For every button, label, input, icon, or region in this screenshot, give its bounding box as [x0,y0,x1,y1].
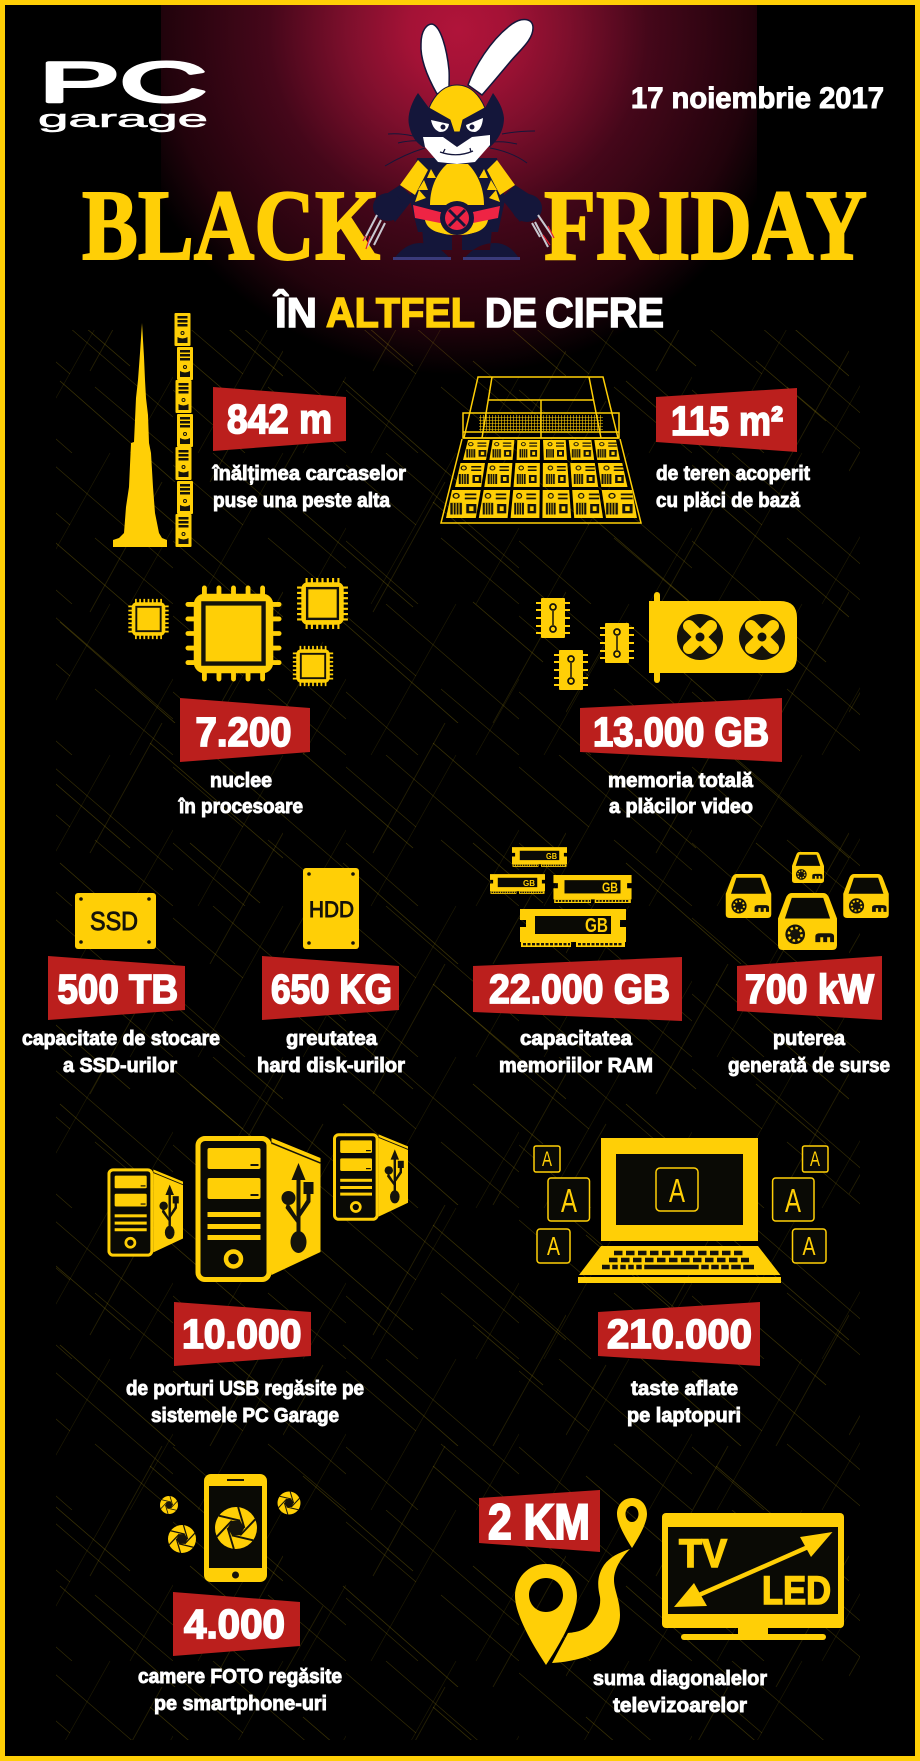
stat: 2 KM [479,1490,844,1717]
banner [213,387,346,451]
caption: pe laptopuri [627,1405,741,1427]
mascot: wolverine rabbit [363,19,554,260]
icon: laptop [578,1138,781,1283]
arms [400,160,515,195]
double arrow [674,1532,832,1607]
icon: RAM sticks: GB [585,915,608,937]
key letters: A [810,1148,820,1171]
stat: 650 KG [257,868,405,1077]
logo: PC Garage [38,50,208,133]
shorts [425,220,488,235]
subtitle: ALTFEL [326,289,475,336]
value: 7.200 [196,709,292,755]
icon: TV [662,1513,844,1640]
stat: 842 m [113,313,406,547]
caption: camere FOTO regăsite [138,1666,342,1688]
subtitle: CIFRE [545,289,664,336]
caption: de teren acoperit [656,463,810,485]
caption: pe smartphone-uri [154,1693,327,1715]
caption: memoria totală [608,770,754,792]
icon: processors [128,578,348,686]
key letters: A [785,1182,801,1219]
banner [473,957,682,1021]
stat: 10.000 [109,1134,408,1427]
icon: camera apertures [159,1492,301,1553]
belly [430,164,484,205]
banner [479,1490,600,1552]
icon: SSD: SSD [90,906,138,936]
key letters: A [561,1182,577,1219]
subtitle: ÎN [273,288,317,336]
caption [627,1378,741,1427]
caption [656,463,810,512]
banner [262,956,399,1020]
banner [173,1592,300,1656]
date: 17 noiembrie 2017 [631,82,884,115]
title: Black Friday: BLACK [82,169,380,281]
key letters [542,1148,820,1261]
caption: înălțimea carcaselor [212,463,406,485]
logo: PC Garage: garage [38,106,208,133]
icon: HDD: HDD [309,897,354,922]
claws [364,215,553,247]
stat: 210.000 [534,1138,828,1427]
caption [608,770,754,818]
subtitle: DE [485,289,537,336]
icon: RAM sticks: GB [546,852,557,861]
stat: 115 m2 [441,377,810,523]
logo: PC Garage: PC [39,50,207,114]
TV text: TV [679,1532,727,1576]
caption: hard disk-urilor [257,1055,405,1077]
ears [421,19,533,95]
stat: 4.000 [138,1474,342,1715]
value: 22.000 GB [489,966,670,1012]
value: 500 TB [58,966,178,1012]
caption: puterea [773,1028,846,1050]
caption: cu plăci de bază [656,490,801,512]
caption: taste aflate [631,1378,738,1400]
caption: a plăcilor video [609,796,753,818]
caption: capacitatea [520,1028,633,1050]
icon: route with pins [515,1498,647,1665]
icon: SSD [75,893,156,949]
icon: RAM sticks: GB [523,879,535,888]
LED text: LED [762,1569,831,1613]
belt [413,205,500,223]
caption: capacitate de stocare [22,1028,220,1050]
banner [48,956,185,1020]
icon: video card [649,592,797,683]
caption: de porturi USB regăsite pe [126,1378,364,1400]
caption [499,1028,653,1077]
caption [257,1028,405,1077]
icon: RAM sticks: GB [602,879,618,895]
caption [212,463,406,512]
banner [656,388,797,452]
caption: sistemele PC Garage [151,1405,339,1427]
caption [22,1028,220,1077]
caption [728,1028,890,1077]
scratched texture [56,330,860,1740]
eyes [431,118,483,132]
icon: computers with USB [109,1134,408,1280]
value: 4.000 [184,1601,285,1647]
key letters: A [802,1231,816,1261]
banner [180,698,310,762]
key letters: A [542,1148,552,1171]
key letters: A [669,1172,685,1209]
icon: stacked cases [174,313,193,547]
stat: 500 TB [22,893,220,1077]
head [408,93,504,147]
icon: power supplies [726,852,889,950]
caption [138,1666,342,1715]
icon: RAM sticks [490,847,632,947]
icon: tennis court [441,377,641,523]
value: 700 kW [745,966,874,1012]
caption: televizoarelor [613,1695,747,1717]
caption: în procesoare [178,796,303,818]
icon: HDD [303,868,359,949]
stat: 7.200 [128,578,348,818]
stat: 22.000 GB [473,847,682,1077]
caption [126,1378,364,1427]
caption [178,770,303,818]
red spotlight glow [161,0,757,375]
buckle [440,201,474,235]
stat: 700 kW [726,852,890,1077]
subtitle [273,288,664,336]
value: 210.000 [607,1311,752,1357]
title: Black Friday: FRIDAY [544,169,867,281]
icon: tower [113,323,167,547]
mask [429,85,485,132]
value: 13.000 GB [593,709,769,755]
value: 2 KM [488,1494,590,1550]
icon: keys [534,1146,828,1263]
value: 842 m [227,396,332,442]
banner [598,1302,760,1366]
muzzle [423,135,490,164]
title: Black Friday [82,169,867,281]
caption: generată de surse [728,1055,890,1077]
forearms and fists [373,185,542,222]
side spikes [415,169,500,202]
icon: memory chips [536,598,634,690]
banner [174,1302,311,1366]
caption [593,1668,767,1717]
stat: 13.000 GB [536,592,797,818]
banner [737,956,882,1020]
value: 10.000 [182,1311,302,1357]
legs and feet [393,228,520,260]
caption: nuclee [210,770,272,792]
caption: memoriilor RAM [499,1055,653,1077]
torso [410,158,505,232]
value: 115 m² [671,398,783,444]
caption: greutatea [286,1028,378,1050]
caption: suma diagonalelor [593,1668,767,1690]
caption: puse una peste alta [213,490,391,512]
caption: a SSD-urilor [63,1055,177,1077]
value: 650 KG [271,966,392,1012]
banner [580,698,782,762]
key letters: A [547,1231,560,1261]
icon: smartphone [204,1474,267,1582]
whiskers [385,131,535,166]
